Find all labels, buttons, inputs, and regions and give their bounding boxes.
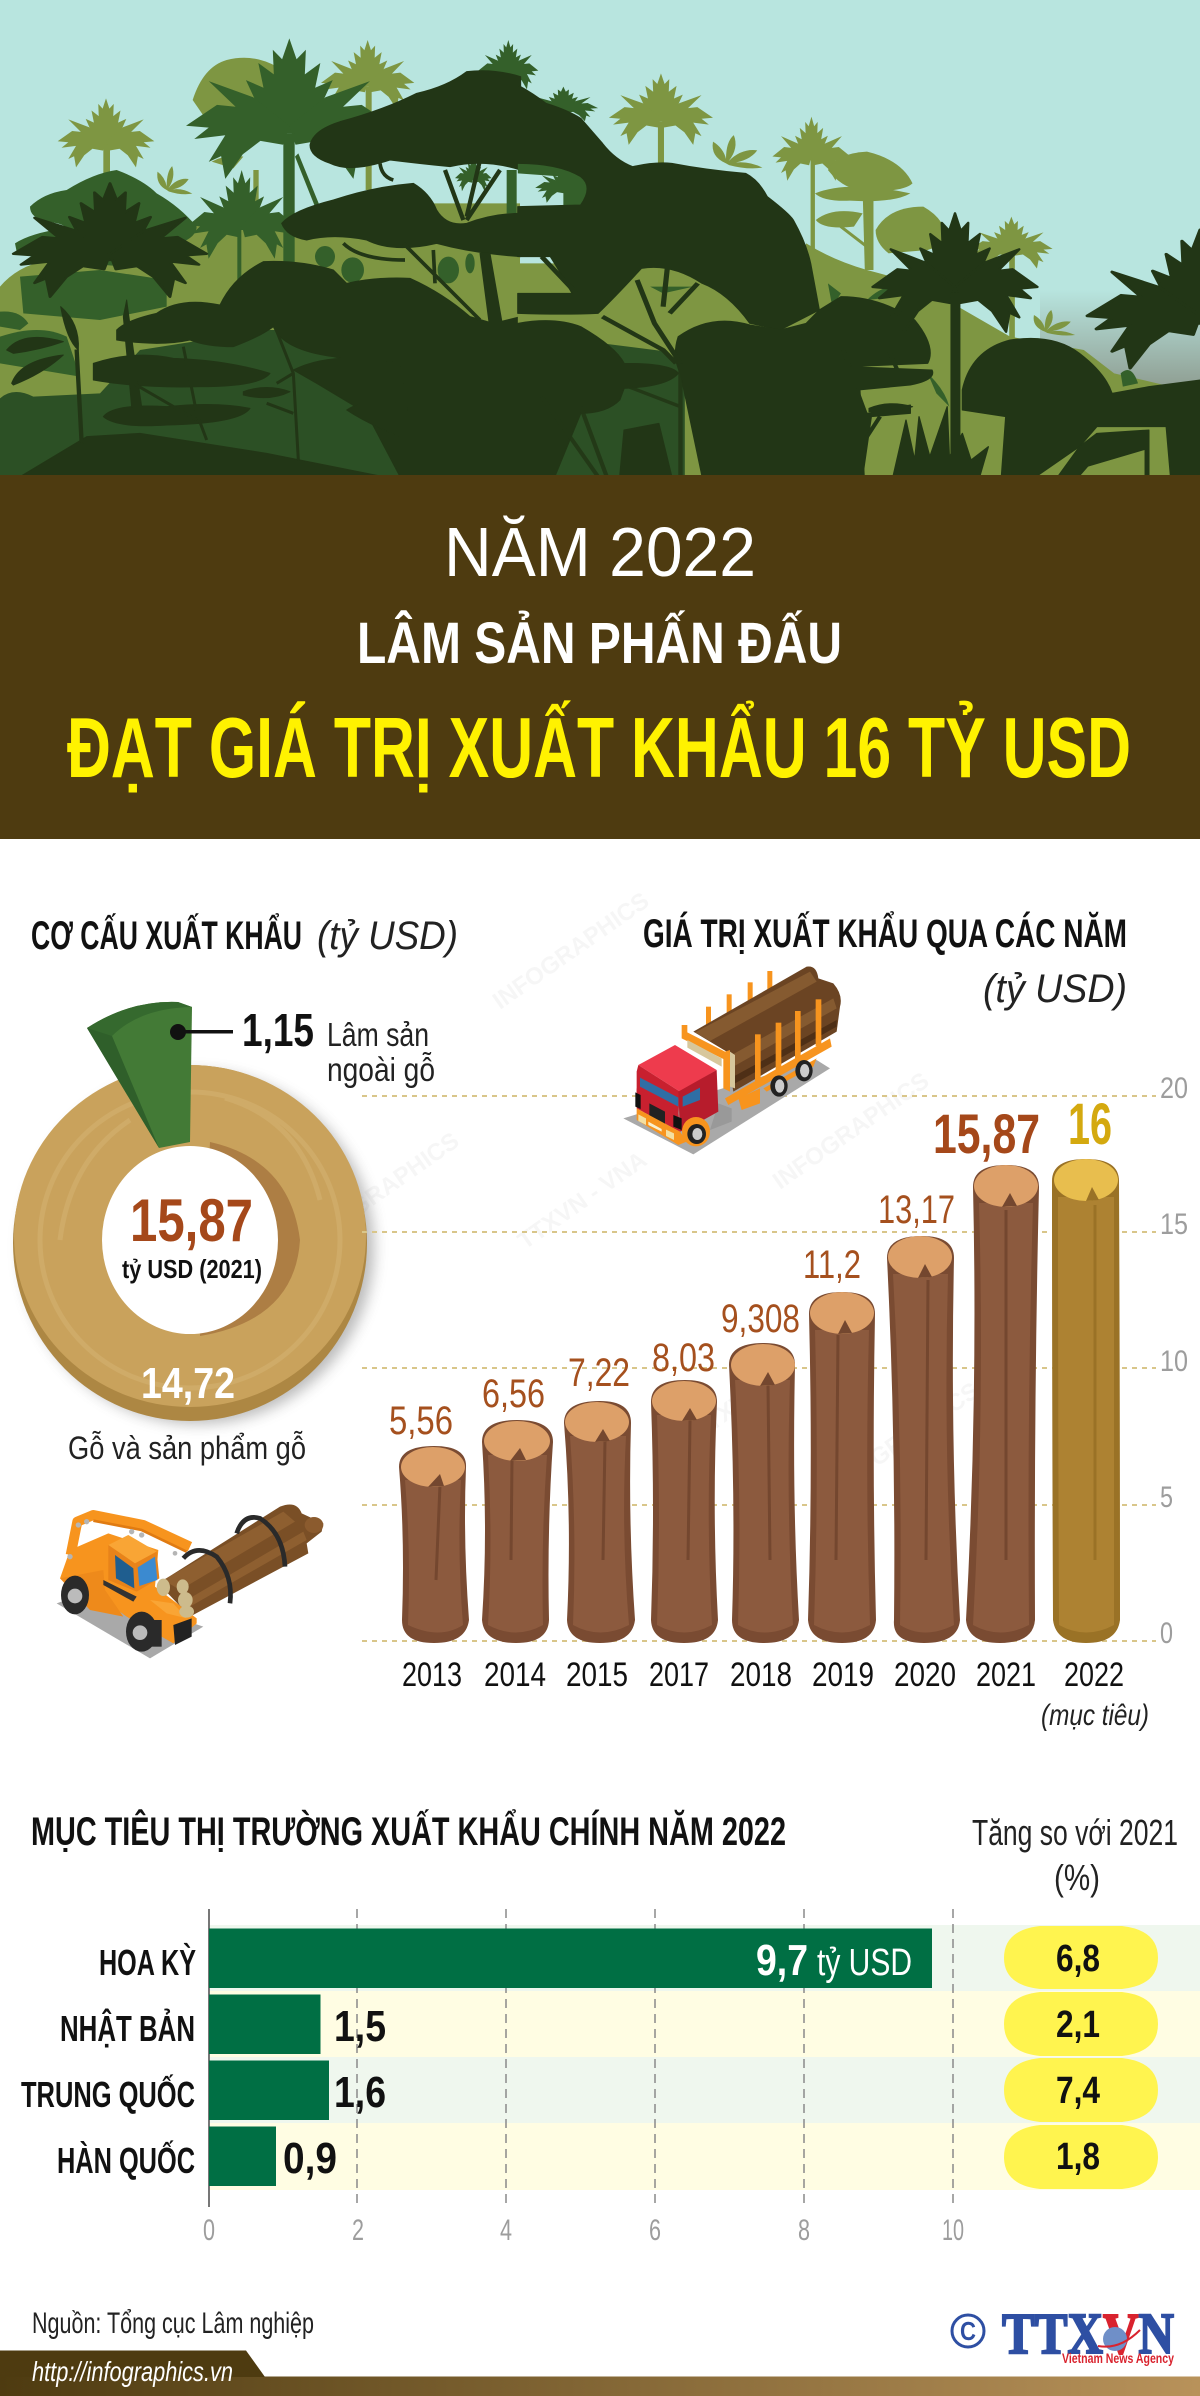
row bands (209, 1925, 1200, 2190)
callout: non-wood forest products: ngoài gỗ (327, 1051, 435, 1088)
value labels: 16 (1068, 1092, 1112, 1157)
value labels: 8,03 (652, 1336, 715, 1380)
log 2019 (808, 1292, 876, 1643)
year labels: 2014 (484, 1656, 546, 1694)
value labels: 13,17 (878, 1188, 955, 1232)
TTXVN logo: C (960, 2316, 976, 2346)
growth values (1056, 1938, 1100, 2178)
growth values: 2,1 (1056, 2004, 1100, 2046)
source note: Nguồn: Tổng cục Lâm nghiệp (32, 2307, 314, 2340)
heading: export structure: (tỷ USD) (317, 914, 458, 958)
y axis labels: 20 (1160, 1072, 1188, 1105)
watermarks: TTXVN - VNA (513, 1146, 652, 1255)
growth values: 7,4 (1056, 2070, 1100, 2112)
column heading: increase vs 2021 (972, 1812, 1178, 1898)
centre unit: tỷ USD (2021) (122, 1254, 262, 1284)
year labels: 2022 (1064, 1656, 1124, 1694)
x axis labels: 8 (798, 2214, 810, 2247)
column chart: export value by year (362, 1072, 1188, 1732)
callout: non-wood forest products (170, 1004, 435, 1088)
y axis labels: 0 (1160, 1617, 1173, 1650)
x axis labels: 6 (649, 2214, 661, 2247)
callout: non-wood forest products: Lâm sản (327, 1016, 429, 1053)
title line 2: LÂM SẢN PHẤN ĐẤU (357, 611, 842, 676)
category labels: HÀN QUỐC (57, 2139, 195, 2181)
growth values: 1,8 (1056, 2136, 1100, 2178)
value labels: 9,308 (721, 1297, 800, 1341)
bars (209, 1928, 932, 2186)
icon: orange log loader (57, 1504, 323, 1658)
label: wood products: Gỗ và sản phẩm gỗ (68, 1430, 306, 1466)
TTXVN logo: TTXVN (1002, 2301, 1174, 2366)
category labels: HOA KỲ (99, 1942, 196, 1983)
heading: export structure: CƠ CẤU XUẤT KHẨU (31, 911, 302, 958)
x axis labels: 10 (942, 2214, 964, 2247)
log 2015 (564, 1401, 635, 1643)
y axis labels: 15 (1160, 1208, 1188, 1241)
y axis labels (1160, 1072, 1188, 1650)
category labels: NHẬT BẢN (60, 2007, 195, 2049)
heading: main export markets: MỤC TIÊU THỊ TRƯỜNG XUẤT KHẨU CHÍNH NĂM 2022 (31, 1807, 786, 1854)
x axis labels: 2 (352, 2214, 364, 2247)
log 2018 (729, 1343, 799, 1643)
footer bar (0, 2350, 1200, 2396)
value labels: 7,22 (568, 1351, 630, 1395)
log 2017 (651, 1380, 718, 1643)
bar chart: main export markets (21, 1909, 1200, 2247)
year labels: 2013 (402, 1656, 462, 1694)
bar values: 9,7 (756, 1936, 808, 1985)
watermarks: TTXVN (688, 1378, 768, 1445)
year labels: 2021 (976, 1656, 1036, 1694)
year labels: (mục tiêu) (1041, 1699, 1149, 1732)
dark lower canopy mass (117, 261, 521, 477)
value labels: 6,56 (482, 1372, 545, 1416)
title line 1: NĂM 2022 (444, 513, 756, 591)
log 2022 target (1052, 1159, 1120, 1643)
year labels: 2019 (812, 1656, 874, 1694)
centre value: 15,87 (130, 1187, 253, 1254)
watermarks: INFOGRAPHICS (488, 887, 654, 1015)
watermarks: INFOGRAPHICS (818, 1377, 984, 1505)
year labels: 2015 (566, 1656, 628, 1694)
category labels (21, 1942, 196, 2181)
forest left half (0, 38, 538, 477)
callout: non-wood forest products: 1,15 (242, 1004, 314, 1056)
watermarks (298, 887, 984, 1505)
footer bar: http://infographics.vn (32, 2356, 233, 2387)
watermarks: INFOGRAPHICS (768, 1067, 934, 1195)
y axis labels: 5 (1160, 1481, 1173, 1514)
year labels: 2017 (649, 1656, 709, 1694)
title banner (0, 475, 1200, 839)
big tree upper canopy (310, 71, 521, 170)
year labels: 2020 (894, 1656, 956, 1694)
column heading: increase vs 2021: (%) (1054, 1857, 1100, 1898)
central lower canopy (676, 297, 933, 477)
icon: red logging truck (623, 966, 841, 1154)
x axis labels: 0 (203, 2214, 215, 2247)
value labels (389, 1092, 1112, 1443)
donut chart: export structure (13, 1002, 374, 1424)
log 2014 (482, 1420, 553, 1643)
value labels: 15,87 (933, 1102, 1040, 1165)
yellow growth badges (1004, 1926, 1158, 2189)
growth values: 6,8 (1056, 1938, 1100, 1980)
log 2013 (399, 1446, 469, 1643)
big tree lower canopy (282, 183, 521, 257)
x axis labels (203, 2214, 964, 2247)
heading: export value by year (643, 909, 1127, 1011)
bar values (283, 1936, 912, 2183)
value labels: 11,2 (803, 1243, 861, 1287)
bar values: 1,6 (334, 2068, 386, 2117)
x axis labels: 4 (500, 2214, 512, 2247)
grid lines (362, 1096, 1156, 1641)
bar values: 0,9 (283, 2134, 337, 2183)
forest illustration header (0, 0, 1200, 477)
year labels: 2018 (730, 1656, 792, 1694)
donut hole (102, 1146, 278, 1334)
y axis labels: 10 (1160, 1345, 1188, 1378)
wood value: 14,72 (141, 1359, 235, 1408)
log 2021 (966, 1165, 1039, 1643)
watermarks: INFOGRAPHICS (298, 1127, 464, 1255)
big tree crown (518, 85, 819, 330)
bar values: tỷ USD (817, 1942, 912, 1984)
category labels: TRUNG QUỐC (21, 2073, 195, 2115)
year labels (402, 1656, 1149, 1732)
grid (357, 1909, 953, 2207)
heading: export value by year: (tỷ USD) (983, 967, 1127, 1011)
right blob (962, 338, 1200, 477)
log 2020 (887, 1236, 960, 1643)
bar values: 1,5 (334, 2002, 386, 2051)
left lower blob (518, 321, 678, 477)
forest right half (518, 73, 1200, 477)
green slice: non-wood products (87, 1002, 192, 1148)
value labels: 5,56 (389, 1399, 453, 1443)
